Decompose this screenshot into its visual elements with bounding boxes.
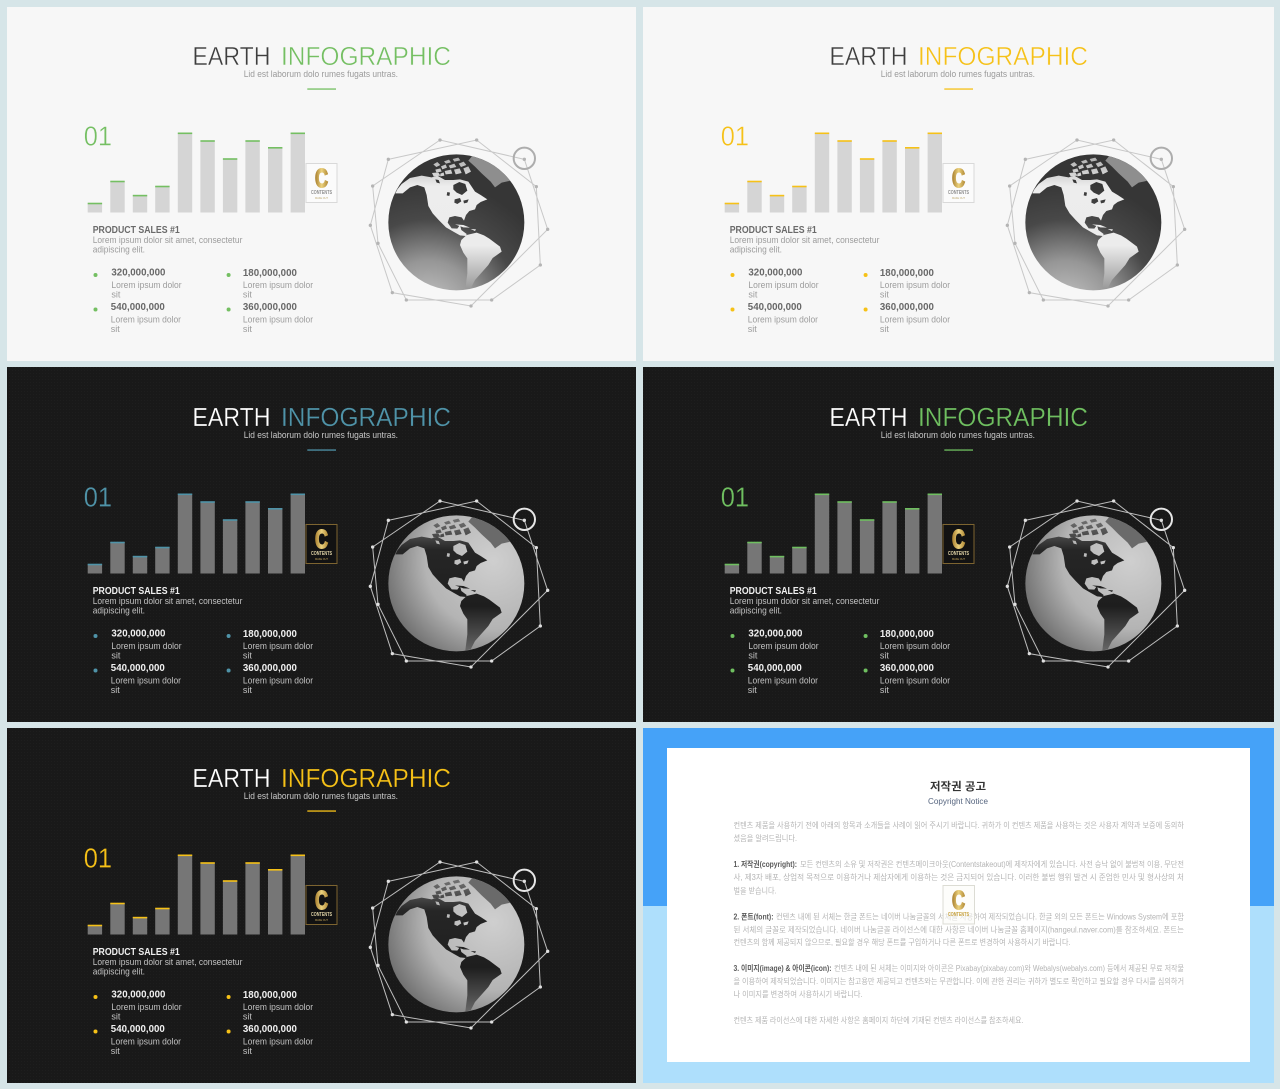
stat list: 320,000,000 [111, 266, 166, 278]
stat list: 540,000,000 [748, 662, 802, 674]
stat list [94, 266, 313, 334]
section 1: copyright [734, 859, 1184, 896]
globe with network ring [369, 499, 549, 669]
section 1: copyright: 벌을 받습니다. [734, 886, 776, 896]
text block: product sales: adipiscing elit. [730, 605, 782, 616]
logo: contents makeout: C [315, 163, 328, 193]
intro paragraph: 셨음을 알려드립니다. [734, 833, 797, 843]
logo: contents makeout: C [952, 163, 965, 193]
panel: light yellow earth infographic [643, 7, 1274, 361]
stat list: Lorem ipsum dolor [243, 1036, 313, 1046]
globe with network ring [369, 860, 549, 1030]
logo: contents makeout [306, 163, 337, 202]
number 01: 01 [721, 120, 749, 152]
logo: contents makeout [943, 163, 974, 202]
title word: infographic: INFOGRAPHIC [918, 402, 1088, 432]
logo: contents makeout: MAKE OUT [952, 196, 965, 200]
stat list: Lorem ipsum dolor [243, 1001, 313, 1012]
text block: product sales: Lorem ipsum dolor sit amet, consectetur [730, 234, 879, 245]
text block: product sales [93, 225, 242, 255]
stat list: 360,000,000 [880, 301, 934, 313]
stat list: sit [111, 650, 121, 660]
title word: infographic: INFOGRAPHIC [281, 402, 451, 432]
logo: contents makeout: CONTENTS [948, 190, 970, 196]
subtitle: Lid est laborum dolo rumes fugats untras. [244, 69, 398, 80]
stat list: 360,000,000 [243, 1023, 297, 1035]
bar chart [725, 494, 942, 574]
title word: earth: EARTH [192, 763, 270, 793]
heading underline [944, 88, 973, 90]
section 1: copyright: 모든 컨텐츠의 소유 및 저작권은 컨텐츠메이크아웃(Contentstakeout)에 제작자에게 있습니다. 사전 승낙 없이 불법적 이용, 무단전 [800, 859, 1184, 869]
text block: product sales: adipiscing elit. [93, 244, 145, 255]
text block: product sales: PRODUCT SALES #1 [93, 225, 180, 236]
text block: product sales [730, 225, 879, 255]
heading underline [944, 449, 973, 451]
stat list: Lorem ipsum dolor [111, 314, 181, 324]
section 2: font: 2. 폰트(font): [734, 912, 774, 922]
text block: product sales: Lorem ipsum dolor sit amet, consectetur [93, 595, 242, 606]
section 2: font [734, 912, 1185, 947]
stat list: 360,000,000 [880, 662, 934, 674]
intro paragraph [734, 820, 1185, 843]
text block: product sales [93, 586, 242, 616]
stat list [94, 988, 313, 1056]
section 2: font: 컨텐츠의 함께 제공되지 않으므로, 필요할 경우 해당 폰트를 구입하거나 다른 폰트로 변경하여 사용하시기 바랍니다. [734, 937, 1070, 947]
logo: contents makeout: CONTENTS [311, 912, 333, 918]
stat list: Lorem ipsum dolor [111, 279, 182, 290]
text block: product sales: PRODUCT SALES #1 [730, 586, 817, 597]
stat list: sit [243, 650, 252, 660]
stat list: Lorem ipsum dolor [243, 640, 313, 651]
globe with network ring [1006, 138, 1186, 308]
stat list: 180,000,000 [880, 628, 934, 640]
text block: product sales: PRODUCT SALES #1 [93, 947, 180, 958]
bar chart [725, 132, 942, 212]
stat list: sit [111, 323, 120, 334]
intro paragraph: 컨텐츠 제품을 사용하기 전에 아래의 항목과 소개들을 사례이 읽어 주시기 바랍니다. 귀하가 이 컨텐츠 제품을 사용하는 것은 사용자 계약과 보증에 동의하 [734, 820, 1185, 830]
section 2: font: 된 서체의 글꼴로 제작되었습니다. 네이버 나눔글꼴 라이선스에 대한 사항은 네이버 나눔글꼴 홈페이지(hangeul.naver.com)를 참조하세요. 폰트는 [734, 924, 1184, 934]
panel: dark green earth infographic [643, 367, 1274, 722]
stat list: sit [111, 288, 121, 300]
number 01: 01 [84, 120, 112, 152]
title word: earth: EARTH [830, 41, 908, 71]
logo: contents makeout [306, 885, 337, 924]
text block: product sales [93, 947, 242, 977]
stat list: sit [880, 323, 889, 334]
stat list: sit [111, 1045, 120, 1056]
logo: contents makeout [943, 524, 974, 564]
section 3: image and icon: 을 이용하여 제작되었습니다. 이미지는 참고용만 제공되고 컨텐츠와는 무관합니다. 이에 관한 권리는 귀하가 별도로 확인하고 필요할 경우 다시를 심의하거 [734, 976, 1184, 986]
title word: earth: EARTH [192, 41, 270, 71]
stat list: sit [243, 684, 252, 695]
number 01: 01 [721, 482, 749, 512]
stat list: sit [243, 323, 252, 334]
copyright heading: 저작권 공고 [930, 779, 986, 793]
stat list: 540,000,000 [111, 1023, 165, 1035]
stat list: sit [243, 288, 252, 300]
stat list: 320,000,000 [748, 266, 803, 278]
logo: contents makeout: C [315, 524, 328, 554]
stat list: Lorem ipsum dolor [748, 279, 819, 290]
section 3: image and icon: 컨텐츠 내에 된 서체는 이미지와 아이콘은 Pixabay(pixabay.com)와 Webalys(webalys.com) 등에서 제공된 무료 저작물 [834, 963, 1184, 973]
stat list: Lorem ipsum dolor [880, 674, 950, 686]
stat list: 360,000,000 [243, 301, 297, 313]
globe with network ring [369, 138, 549, 308]
stat list: sit [880, 684, 889, 695]
stat list: 320,000,000 [748, 628, 803, 640]
text block: product sales: adipiscing elit. [93, 966, 145, 977]
subtitle: Lid est laborum dolo rumes fugats untras. [881, 430, 1035, 441]
stat list: 540,000,000 [111, 662, 165, 674]
text block: product sales [730, 586, 879, 616]
stat list: Lorem ipsum dolor [111, 1036, 181, 1046]
stat list: sit [243, 1045, 252, 1056]
text block: product sales: PRODUCT SALES #1 [730, 225, 817, 236]
section 3: image and icon: 나 이미지를 변경하여 사용하시기 바랍니다. [734, 989, 862, 999]
stat list: Lorem ipsum dolor [243, 279, 313, 290]
logo: contents makeout: C [315, 885, 328, 915]
stat list: 540,000,000 [111, 301, 165, 313]
heading underline [307, 88, 336, 90]
stat list: 180,000,000 [243, 628, 297, 640]
stat list: Lorem ipsum dolor [748, 314, 818, 324]
text block: product sales: PRODUCT SALES #1 [93, 586, 180, 597]
subtitle: Lid est laborum dolo rumes fugats untras. [244, 430, 398, 441]
text block: product sales: adipiscing elit. [730, 244, 782, 255]
stat list: Lorem ipsum dolor [748, 674, 818, 686]
stat list: 180,000,000 [880, 267, 934, 279]
copyright subheading: Copyright Notice [928, 796, 988, 806]
panel: light green earth infographic [7, 7, 636, 361]
stat list: Lorem ipsum dolor [243, 314, 313, 324]
stat list: Lorem ipsum dolor [880, 279, 950, 290]
logo: contents makeout: CONTENTS [311, 190, 333, 196]
logo: contents makeout: CONTENTS [948, 912, 970, 918]
stat list: sit [748, 288, 758, 300]
title word: infographic: INFOGRAPHIC [281, 763, 451, 793]
bar chart [88, 494, 305, 574]
panel: copyright notice [643, 728, 1274, 1083]
bar chart [88, 132, 305, 212]
stat list: 320,000,000 [111, 988, 166, 1000]
logo: contents makeout: MAKE OUT [315, 557, 328, 561]
stat list: 320,000,000 [111, 628, 166, 640]
stat list: sit [748, 323, 757, 334]
number 01: 01 [84, 482, 112, 512]
logo: contents makeout: MAKE OUT [952, 557, 965, 561]
text block: product sales: Lorem ipsum dolor sit amet, consectetur [93, 234, 242, 245]
stat list: Lorem ipsum dolor [243, 674, 313, 686]
panel: dark yellow earth infographic [7, 728, 636, 1083]
section 1: copyright: 사, 제3자 배포, 상업적 목적으로 이용하거나 제삼자에게 이용하는 것은 금지되어 있습니다. 이러한 불법 행위 발견 시 준엄한 민사 및 형사상의 처 [734, 872, 1184, 882]
stat list: 540,000,000 [748, 301, 802, 313]
section 3: image and icon: 3. 이미지(image) & 아이콘(icon): [734, 963, 832, 973]
stat list: sit [111, 1010, 121, 1022]
number 01: 01 [84, 842, 112, 874]
stat list: 360,000,000 [243, 662, 297, 674]
logo: contents makeout: C [952, 885, 965, 915]
heading underline [307, 449, 336, 451]
section 2: font: 컨텐츠 내에 된 서체는 한글 폰트는 네이버 나눔글꼴의 서체를 사용하여 제작되었습니다. 한글 외의 모든 폰트는 Windows System에 포함 [776, 912, 1185, 922]
logo: contents makeout [306, 524, 337, 564]
stat list: Lorem ipsum dolor [880, 640, 950, 651]
stat list: Lorem ipsum dolor [111, 1001, 182, 1012]
title word: earth: EARTH [192, 402, 270, 432]
logo: contents makeout: CONTENTS [948, 551, 970, 557]
stat list [94, 628, 313, 695]
section 3: image and icon [734, 963, 1184, 999]
closing note: 컨텐츠 제품 라이선스에 대한 자세한 사항은 홈페이지 하단에 기재된 컨텐츠 라이선스를 참조하세요. [734, 1015, 1024, 1025]
stat list: Lorem ipsum dolor [111, 640, 182, 651]
title word: infographic: INFOGRAPHIC [281, 41, 451, 71]
stat list: Lorem ipsum dolor [880, 314, 950, 324]
heading underline [307, 810, 336, 812]
subtitle: Lid est laborum dolo rumes fugats untras. [244, 791, 398, 802]
stat list: sit [111, 684, 120, 695]
stat list: 180,000,000 [243, 267, 297, 279]
logo: contents makeout [943, 885, 974, 924]
stat list: sit [243, 1010, 252, 1022]
text block: product sales: adipiscing elit. [93, 605, 145, 616]
text block: product sales: Lorem ipsum dolor sit amet, consectetur [93, 956, 242, 967]
logo: contents makeout: C [952, 524, 965, 554]
stat list: Lorem ipsum dolor [748, 640, 819, 651]
section 1: copyright: 1. 저작권(copyright): [734, 859, 797, 869]
panel: dark teal earth infographic [7, 367, 636, 722]
globe with network ring [1006, 499, 1186, 669]
stat list: sit [748, 684, 757, 695]
stat list: sit [880, 650, 889, 660]
stat list: sit [880, 288, 889, 300]
bar chart [88, 854, 305, 934]
subtitle: Lid est laborum dolo rumes fugats untras. [881, 69, 1035, 80]
text block: product sales: Lorem ipsum dolor sit amet, consectetur [730, 595, 879, 606]
stat list [730, 628, 950, 695]
stat list: Lorem ipsum dolor [111, 674, 181, 686]
logo: contents makeout: CONTENTS [311, 551, 333, 557]
stat list: sit [748, 650, 758, 660]
stat list: 180,000,000 [243, 989, 297, 1001]
logo: contents makeout: MAKE OUT [315, 196, 328, 200]
title word: infographic: INFOGRAPHIC [918, 41, 1088, 71]
logo: contents makeout: MAKE OUT [315, 918, 328, 922]
stat list [730, 266, 950, 334]
title word: earth: EARTH [830, 402, 908, 432]
